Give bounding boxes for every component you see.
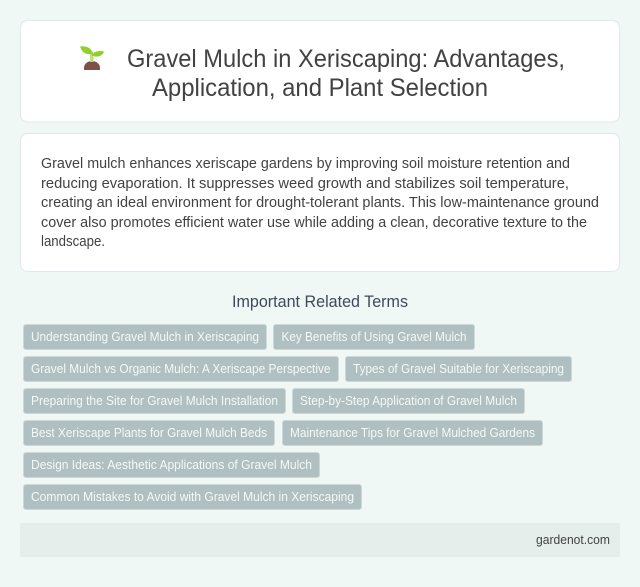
tag: Step-by-Step Application of Gravel Mulch [300, 393, 517, 408]
icon: seedling [80, 46, 104, 70]
footer text: gardenot.com [536, 532, 610, 547]
footer bar [20, 523, 620, 557]
tag [282, 420, 542, 446]
title [127, 45, 565, 102]
tag [24, 420, 274, 446]
tag [24, 388, 286, 414]
tag [24, 324, 266, 350]
summary text: creating an ideal environment for drought-tolerant plants. This low-maintenance ground [41, 195, 599, 211]
tag [24, 356, 338, 382]
tag: Best Xeriscape Plants for Gravel Mulch Beds [31, 425, 267, 440]
tag [346, 356, 572, 382]
tag [24, 484, 362, 510]
related terms tags [24, 324, 572, 510]
tag: Gravel Mulch vs Organic Mulch: A Xeriscape Perspective [31, 361, 330, 376]
title: Gravel Mulch in Xeriscaping: Advantages, [127, 45, 565, 73]
tag: Types of Gravel Suitable for Xeriscaping [353, 361, 564, 376]
tag: Understanding Gravel Mulch in Xeriscaping [31, 329, 259, 344]
tag: Common Mistakes to Avoid with Gravel Mulch in Xeriscaping [31, 489, 354, 504]
tag: Preparing the Site for Gravel Mulch Installation [31, 393, 278, 408]
summary text: reducing evaporation. It suppresses weed growth and stabilizes soil temperature, [41, 176, 569, 192]
panel: summary [20, 134, 620, 272]
tag: Maintenance Tips for Gravel Mulched Gardens [290, 425, 535, 440]
tag [274, 324, 474, 350]
summary text: Gravel mulch enhances xeriscape gardens by improving soil moisture retention and [41, 156, 570, 172]
summary text [41, 156, 599, 250]
tag [24, 452, 320, 478]
tag: Design Ideas: Aesthetic Applications of Gravel Mulch [31, 457, 312, 472]
summary text: cover also promotes efficient water use while adding a clean, decorative texture to the [41, 215, 587, 231]
header panel [20, 20, 620, 122]
tag [292, 388, 524, 414]
summary text: landscape. [41, 234, 105, 250]
heading: related terms: Important Related Terms [232, 293, 408, 311]
title: Application, and Plant Selection [152, 74, 488, 102]
tag: Key Benefits of Using Gravel Mulch [282, 329, 466, 344]
